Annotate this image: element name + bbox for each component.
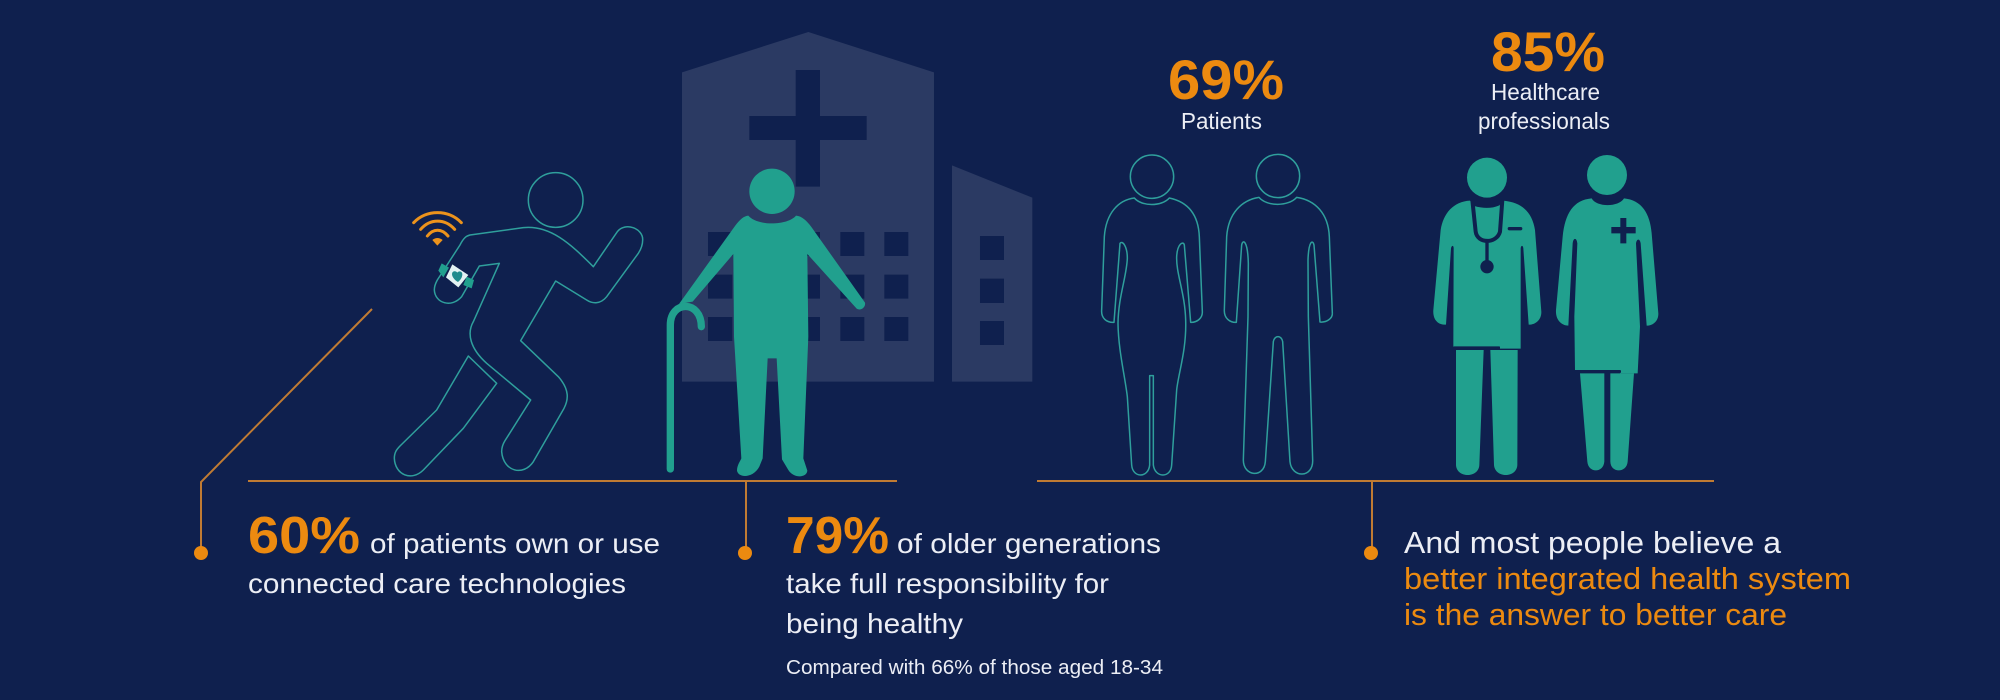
text block: 79% older generations: take full responsibility for	[786, 568, 1109, 599]
baseline right with connector	[1037, 481, 1714, 560]
icon: running patient with wearable	[394, 173, 643, 476]
icon: healthcare professionals	[1433, 155, 1658, 475]
stat: 85% healthcare professionals	[1478, 20, 1610, 134]
figure: nurse	[1556, 155, 1658, 470]
text block: 79% older generations: being healthy	[786, 608, 963, 639]
text block: 79% older generations: Compared with 66% of those aged 18-34	[786, 657, 1163, 679]
icon: hospital buildings	[682, 32, 1032, 382]
icon: older person with cane	[670, 169, 865, 476]
stat: 85% healthcare professionals: Healthcare	[1491, 79, 1600, 105]
icon: wifi signal	[414, 213, 461, 246]
text block: 79% older generations: 79%	[786, 507, 889, 565]
text block: 60% connected care: connected care technologies	[248, 568, 626, 599]
text block: 79% older generations	[786, 507, 1163, 679]
stat: 85% healthcare professionals: professionals	[1478, 108, 1610, 134]
text block: 60% connected care: 60%	[248, 507, 360, 565]
text block: better integrated health system: And most people believe a	[1404, 525, 1782, 560]
stat: 69% patients: Patients	[1181, 108, 1262, 134]
text block: better integrated health system: is the answer to better care	[1404, 597, 1787, 632]
figure: man patient	[1224, 154, 1332, 474]
stat: 69% patients: 69%	[1168, 48, 1284, 111]
figure: doctor	[1433, 158, 1541, 475]
stat: 85% healthcare professionals: 85%	[1491, 20, 1605, 83]
text block: 60% connected care: of patients own or use	[370, 528, 660, 559]
text block: 79% older generations: of older generations	[897, 528, 1161, 559]
text block: better integrated health system	[1404, 525, 1851, 632]
text block: 60% connected care	[248, 507, 660, 599]
icon: smartwatch	[438, 263, 474, 288]
icon: patients outline figures	[1102, 154, 1332, 475]
baseline left with connectors	[194, 309, 897, 560]
figure: woman patient	[1102, 155, 1202, 475]
text block: better integrated health system: better integrated health system	[1404, 561, 1851, 596]
